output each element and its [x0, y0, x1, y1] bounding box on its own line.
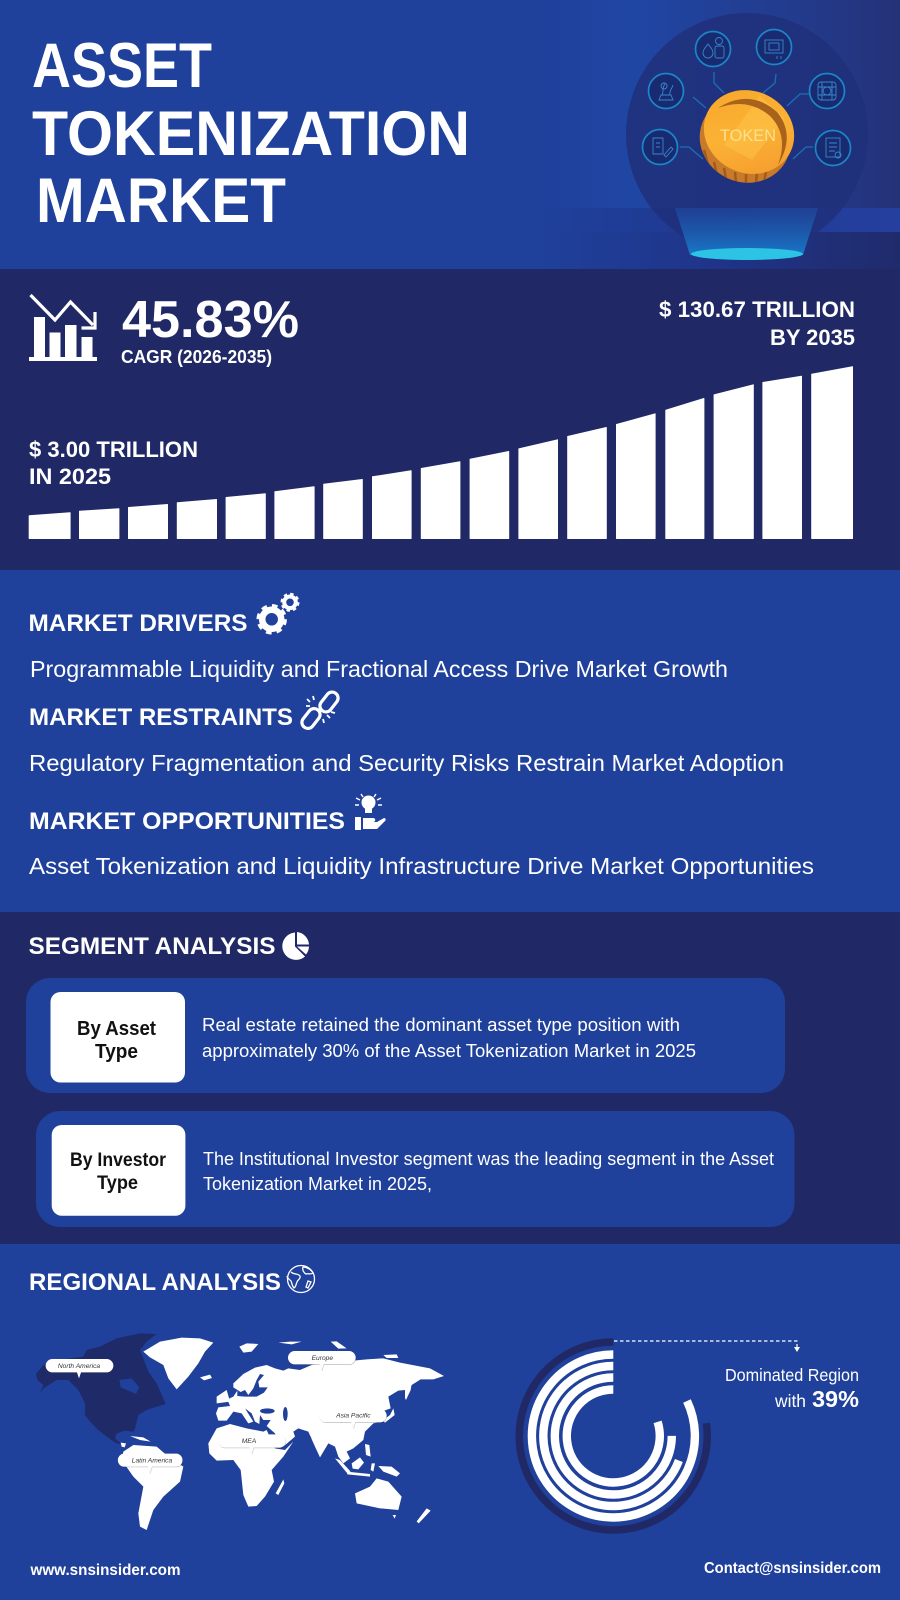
2025 value [29, 437, 198, 489]
heading: market drivers: MARKET DRIVERS [28, 610, 248, 637]
footer: website: www.snsinsider.com [30, 1562, 181, 1579]
callout: North America [46, 1359, 113, 1378]
land masses [121, 1338, 444, 1530]
radial bar chart [519, 1342, 707, 1530]
region: North America [36, 1333, 166, 1444]
panel: regional analysis [0, 1244, 900, 1600]
bar chart [29, 367, 852, 538]
connector lines [680, 72, 813, 159]
card: by asset type [26, 978, 785, 1093]
illustration: token hologram [626, 13, 868, 260]
callout: MEA [218, 1434, 286, 1454]
callout: Asia Pacific: Asia Pacific [335, 1413, 371, 1420]
callout: dominated region: with [774, 1391, 806, 1411]
card: by asset type: By Asset [77, 1018, 156, 1040]
coin [700, 90, 794, 183]
icon: broken chain [299, 690, 341, 731]
icon glyphs [653, 38, 841, 158]
card: by asset type: approximately 30% of the Asset Tokenization Market in 2025 [202, 1040, 696, 1061]
icon: hand with bulb [355, 794, 386, 830]
title: ASSET [32, 31, 212, 101]
card: by investor type: By Investor [70, 1150, 167, 1171]
2035 value: $ 130.67 TRILLION [659, 297, 855, 322]
panel: segment analysis [0, 912, 900, 1244]
inland seas [260, 1407, 312, 1437]
icon: gears [258, 594, 298, 633]
2025 value: $ 3.00 TRILLION [29, 437, 198, 462]
CAGR value: 45.83% [122, 291, 299, 349]
callout: Europe: Europe [312, 1355, 333, 1362]
icon: chart with declining arrow [29, 295, 97, 361]
2025 value: IN 2025 [29, 464, 111, 489]
title [32, 31, 470, 236]
callout: dominated region: 39% [812, 1386, 859, 1412]
footer: contact: Contact@snsinsider.com [704, 1560, 881, 1577]
world map [36, 1333, 444, 1530]
icon: globe [287, 1266, 314, 1292]
heading: market restraints: MARKET RESTRAINTS [29, 704, 293, 731]
callout: dominated region: Dominated Region [725, 1365, 859, 1385]
callout: Asia Pacific [319, 1409, 387, 1428]
callout: MEA: MEA [242, 1438, 257, 1445]
card: by asset type: Real estate retained the dominant asset type position with [202, 1014, 680, 1035]
coin: TOKEN [720, 126, 776, 145]
card: by investor type: Type [97, 1173, 138, 1194]
title: TOKENIZATION [32, 99, 470, 169]
2035 value: BY 2035 [770, 325, 855, 350]
panel: market dynamics [0, 570, 900, 912]
icon circles [642, 30, 850, 166]
CAGR label: CAGR (2026-2035) [121, 347, 272, 367]
heading: segment analysis: SEGMENT ANALYSIS [28, 933, 276, 960]
card: by investor type: The Institutional Investor segment was the leading segment in the Asset [203, 1148, 774, 1169]
title: MARKET [36, 166, 286, 236]
callout: Latin America: Latin America [132, 1458, 173, 1465]
arrow: dashed leader [614, 1341, 800, 1352]
card: by investor type: Tokenization Market in 2025, [203, 1173, 432, 1194]
heading: regional analysis: REGIONAL ANALYSIS [29, 1269, 281, 1296]
text: drivers: Programmable Liquidity and Fractional Access Drive Market Growth [30, 656, 728, 682]
callout: dominated region [725, 1365, 859, 1412]
text: restraints: Regulatory Fragmentation and Security Risks Restrain Market Adoption [29, 750, 784, 776]
callout: Europe [288, 1351, 356, 1371]
panel: market size [0, 269, 900, 570]
panel: header background [0, 0, 900, 269]
callout: North America: North America [58, 1363, 100, 1370]
icon: pie chart [282, 932, 309, 960]
heading: market opportunities: MARKET OPPORTUNITIES [29, 808, 345, 835]
card: by asset type: Type [95, 1041, 138, 1063]
2035 value [659, 297, 855, 350]
card: by investor type [36, 1111, 794, 1227]
text: opportunities: Asset Tokenization and Liquidity Infrastructure Drive Market Opportunities [29, 853, 814, 879]
callout: Latin America [118, 1454, 183, 1473]
